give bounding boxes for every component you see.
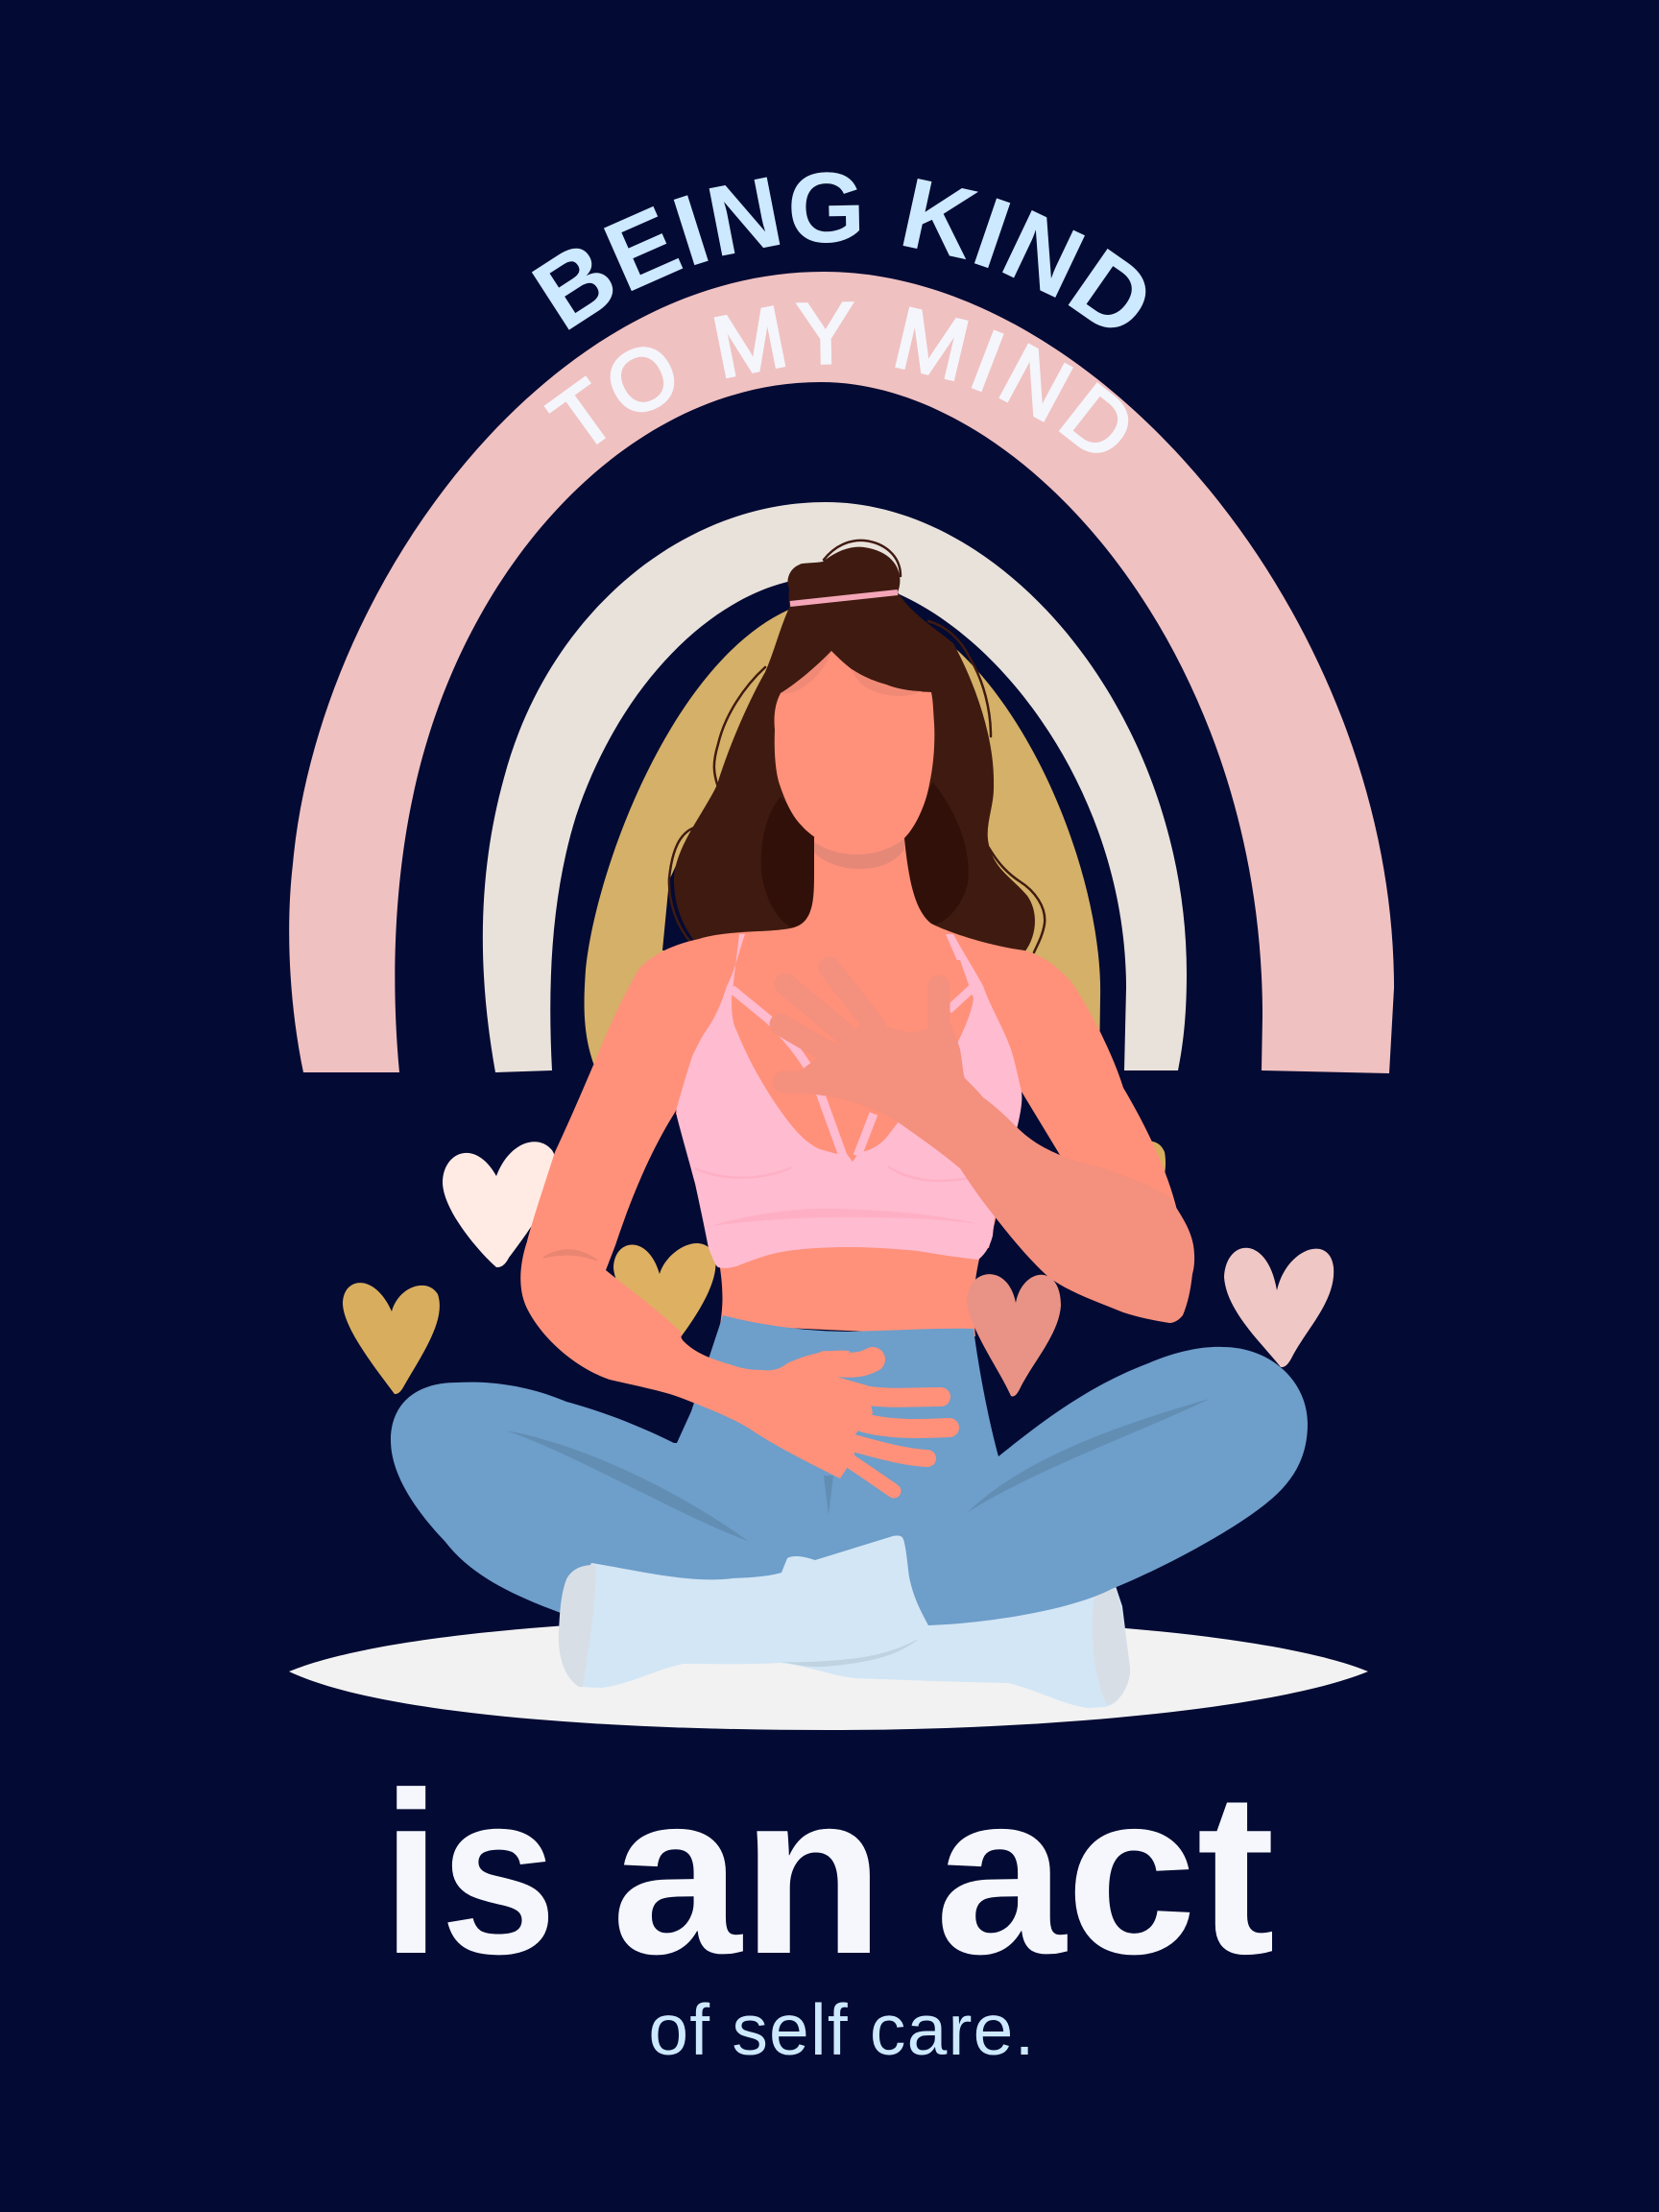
sock crease shadow — [781, 1639, 919, 1667]
sock left body — [579, 1535, 928, 1688]
heading: to my mind: TO MY MIND — [543, 301, 1129, 453]
heart: cream — [443, 1142, 557, 1267]
bra neckline skin — [732, 960, 974, 1154]
midriff — [715, 1238, 984, 1336]
hair mass with bun — [674, 547, 1035, 952]
hair band — [790, 592, 898, 604]
palm and forearm — [779, 1018, 1194, 1323]
bra inner strap left — [732, 989, 843, 1156]
finger three — [850, 1442, 927, 1458]
finger four — [840, 1455, 894, 1491]
jeans wrinkle left — [506, 1431, 748, 1541]
heart: gold centre — [613, 1243, 715, 1349]
sock left cap — [559, 1565, 596, 1687]
hair strands — [669, 541, 1045, 952]
mat ellipse — [289, 1617, 1368, 1730]
left arm and hand on belly — [520, 939, 950, 1491]
rainbow arch: inner gold — [585, 597, 1100, 1066]
jeans — [391, 1315, 1308, 1651]
heart: salmon — [967, 1274, 1061, 1396]
bra body — [676, 934, 1022, 1268]
figure: neck shadow — [814, 838, 904, 869]
subtext: of self care: of self care. — [648, 1989, 1036, 2070]
figure: chest, neck and right upper arm — [676, 837, 1181, 1248]
bra band line — [710, 1209, 978, 1226]
bra cup line right — [888, 1166, 970, 1181]
arm and palm shape — [520, 939, 873, 1479]
sock: left foot — [559, 1535, 928, 1688]
jeans wrinkle centre — [824, 1476, 833, 1515]
finger one — [859, 1394, 941, 1398]
hair inner shadow right — [902, 782, 969, 926]
hair gap shadow — [662, 784, 718, 950]
figure: face — [775, 651, 934, 853]
main text: is an act — [382, 1744, 1275, 2002]
bra inner strap right — [857, 987, 974, 1156]
hair: back — [662, 541, 1045, 952]
figure: hairline shadow — [781, 651, 922, 696]
heart: gold left — [343, 1283, 440, 1394]
hair inner shadow left — [761, 797, 816, 929]
thumb — [826, 1359, 873, 1365]
heart: pale pink right — [1224, 1248, 1334, 1367]
sock: right foot — [781, 1575, 1130, 1708]
right forearm and hand on chest — [779, 968, 1194, 1323]
jeans wrinkle right — [968, 1399, 1210, 1512]
jeans shape — [391, 1315, 1308, 1651]
sock right body — [781, 1575, 1130, 1708]
finger two — [864, 1423, 950, 1429]
bra cup line left — [695, 1167, 792, 1178]
rainbow arch: middle beige — [483, 502, 1187, 1072]
fingers — [781, 968, 939, 1085]
main text: is an act: act — [935, 1744, 1275, 2002]
fingers — [826, 1359, 950, 1491]
main text: is an act: an — [612, 1744, 884, 2002]
heading: being kind: BEING KIND — [532, 172, 1146, 330]
elbow crease — [543, 1250, 597, 1261]
main text: is an act: is — [382, 1744, 557, 2002]
rainbow arch: outer pink — [289, 272, 1394, 1073]
bra — [676, 934, 1022, 1268]
heart: gold behind arm — [1123, 1141, 1166, 1200]
sock right cap — [1093, 1575, 1130, 1705]
